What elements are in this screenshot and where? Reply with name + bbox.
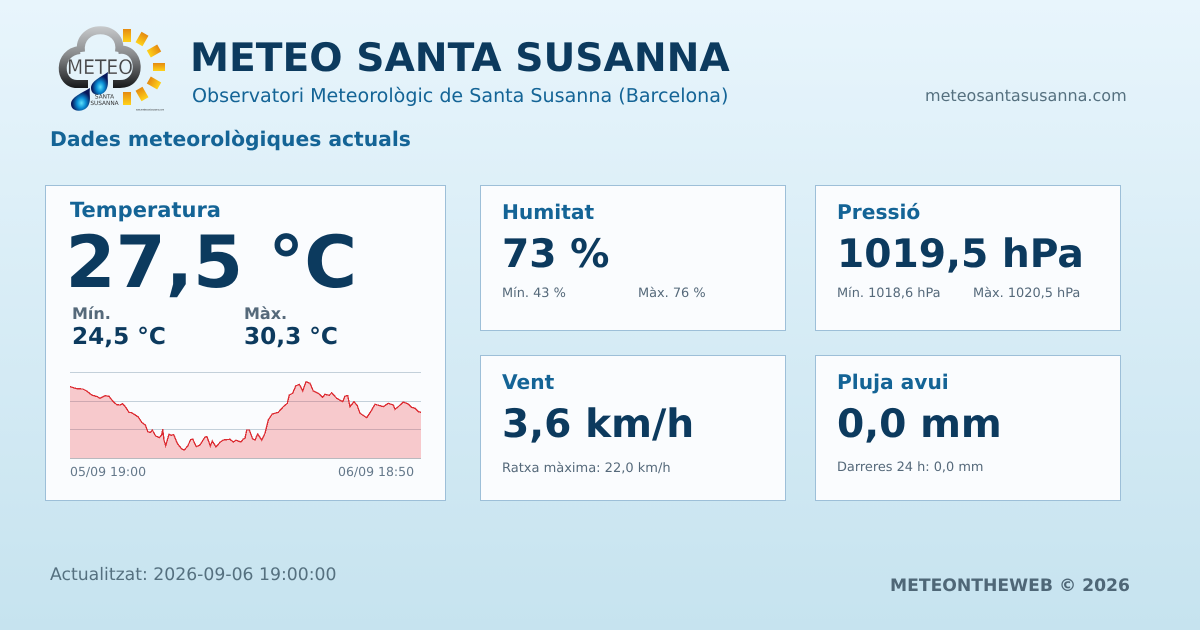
logo wordmark: METEO bbox=[67, 55, 133, 79]
chart start time: 05/09 19:00 bbox=[70, 464, 146, 479]
section heading: Dades meteorològiques actuals bbox=[50, 126, 411, 150]
logo place name bbox=[90, 94, 164, 112]
pressure maximum: Màx. 1020,5 hPa bbox=[973, 286, 1080, 300]
rain label: Pluja avui bbox=[837, 370, 949, 394]
panel: wind bbox=[480, 355, 786, 501]
temperature line bbox=[70, 382, 421, 450]
pressure label: Pressió bbox=[837, 200, 920, 224]
icon: cloud bbox=[63, 30, 137, 84]
wind gust: Ratxa màxima: 22,0 km/h bbox=[502, 460, 671, 476]
temperature area bbox=[70, 382, 421, 458]
chart end time: 06/09 18:50 bbox=[338, 464, 414, 479]
panel: temperature bbox=[45, 185, 446, 501]
footer credit: METEONTHEWEB © 2026 bbox=[890, 576, 1130, 596]
logo bbox=[58, 26, 165, 112]
minimum temperature: Mín. bbox=[72, 304, 111, 322]
panel: rain bbox=[815, 355, 1121, 501]
humidity value: 73 % bbox=[502, 232, 609, 277]
update timestamp: Actualitzat: 2026-09-06 19:00:00 bbox=[50, 565, 336, 585]
humidity minimum: Mín. 43 % bbox=[502, 286, 566, 300]
wind value: 3,6 km/h bbox=[502, 402, 694, 447]
icon: sun rays bbox=[123, 29, 165, 105]
humidity label: Humitat bbox=[502, 200, 594, 224]
logo place name: SANTA bbox=[95, 94, 114, 100]
title: METEO SANTA SUSANNA bbox=[190, 36, 730, 80]
subtitle: Observatori Meteorològic de Santa Susanna (Barcelona) bbox=[192, 84, 728, 107]
panel: humidity bbox=[480, 185, 786, 331]
rain last 24 hours: Darreres 24 h: 0,0 mm bbox=[837, 460, 983, 474]
maximum temperature: Màx. bbox=[244, 304, 287, 322]
minimum temperature: 24,5 °C bbox=[72, 323, 166, 350]
humidity maximum: Màx. 76 % bbox=[638, 286, 706, 300]
pressure value: 1019,5 hPa bbox=[837, 232, 1084, 277]
temperature value: 27,5 °C bbox=[66, 220, 357, 304]
temperature area chart bbox=[70, 372, 421, 459]
maximum temperature: 30,3 °C bbox=[244, 323, 338, 350]
pressure minimum: Mín. 1018,6 hPa bbox=[837, 286, 941, 300]
maximum temperature bbox=[244, 304, 338, 350]
panel: pressure bbox=[815, 185, 1121, 331]
rain value: 0,0 mm bbox=[837, 402, 1002, 447]
temperature label: Temperatura bbox=[70, 198, 221, 222]
wind label: Vent bbox=[502, 370, 554, 394]
website: meteosantasusanna.com bbox=[925, 86, 1127, 105]
icon: water drops bbox=[71, 72, 108, 111]
logo place name: SUSANNA bbox=[90, 100, 119, 107]
minimum temperature bbox=[72, 304, 166, 350]
